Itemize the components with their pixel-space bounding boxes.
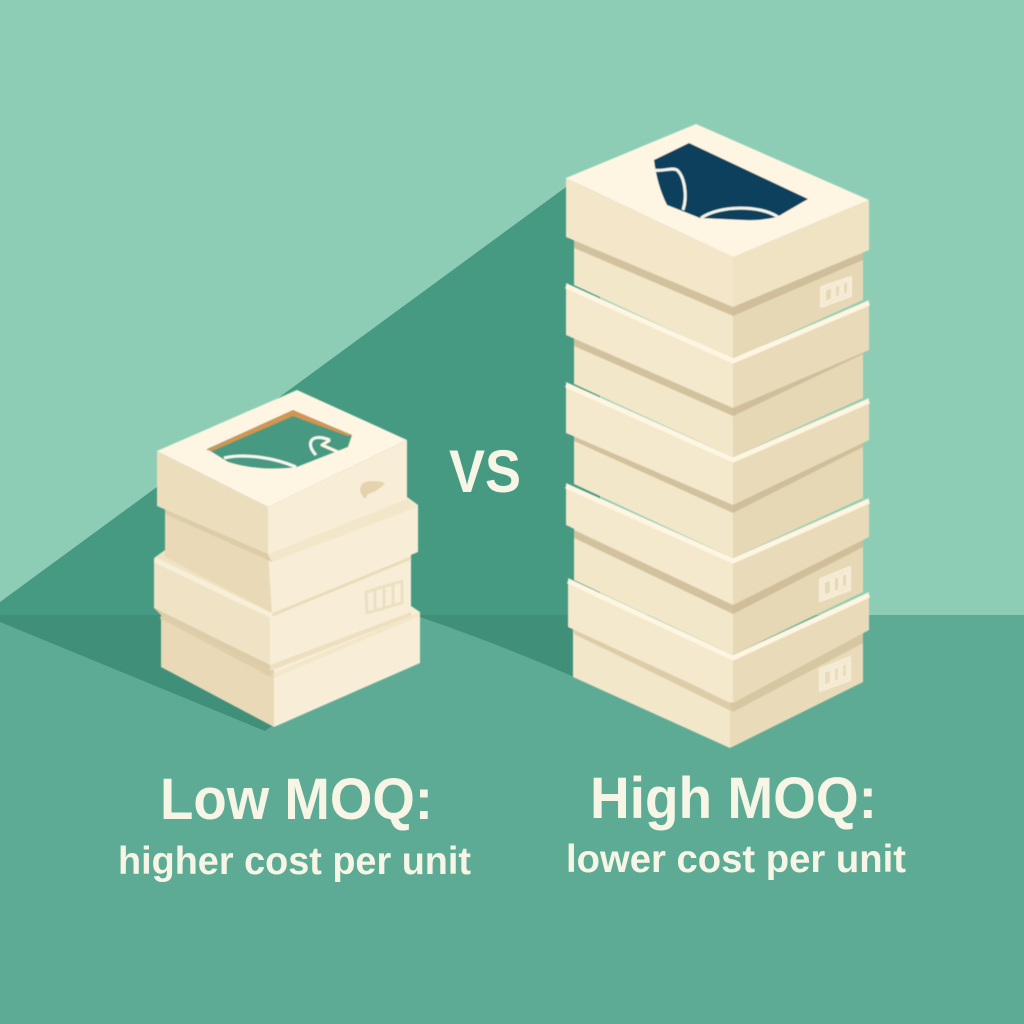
barcode mark on bottom box [820, 657, 850, 691]
box 2 lid [566, 283, 869, 408]
box 2 [165, 497, 418, 613]
box 3 lid highlight [566, 385, 869, 460]
barcode mark on box 2 body [821, 277, 851, 307]
low MOQ caption [118, 767, 471, 883]
box 3 [154, 545, 411, 673]
barcode mark on box 5 body [820, 567, 850, 601]
high MOQ heading: High MOQ: [590, 766, 877, 831]
low MOQ box stack [154, 390, 420, 727]
box 4 lid [566, 483, 869, 605]
high MOQ subheading: lower cost per unit [566, 838, 906, 881]
window showing underwear, green [206, 410, 352, 469]
box 2 lid highlight [566, 286, 869, 361]
vs label: VS [449, 438, 521, 505]
low MOQ heading: Low MOQ: [160, 767, 433, 832]
box 3 lid [566, 382, 869, 505]
barcode mark on box 3 [366, 581, 402, 613]
box 6 (bottom body) [573, 620, 863, 748]
low MOQ subheading: higher cost per unit [118, 840, 471, 883]
seam and highlight between boxes 2 and 3 [155, 558, 411, 616]
box 4 lid highlight [566, 486, 869, 561]
box 3 body [574, 335, 863, 457]
dent mark on lid [360, 481, 385, 499]
window showing navy underwear [654, 143, 808, 220]
box 5 lid [568, 578, 869, 703]
high MOQ caption [566, 766, 906, 881]
box 4 body [574, 430, 863, 558]
high MOQ box stack [566, 124, 869, 748]
box 4 (bottom) [161, 606, 420, 727]
box 5 lid highlight [568, 581, 869, 658]
box 5 body [574, 527, 863, 655]
box 2 body [574, 237, 863, 359]
box 1 (top, open window) [157, 390, 407, 554]
box 1 top lid [566, 124, 869, 307]
